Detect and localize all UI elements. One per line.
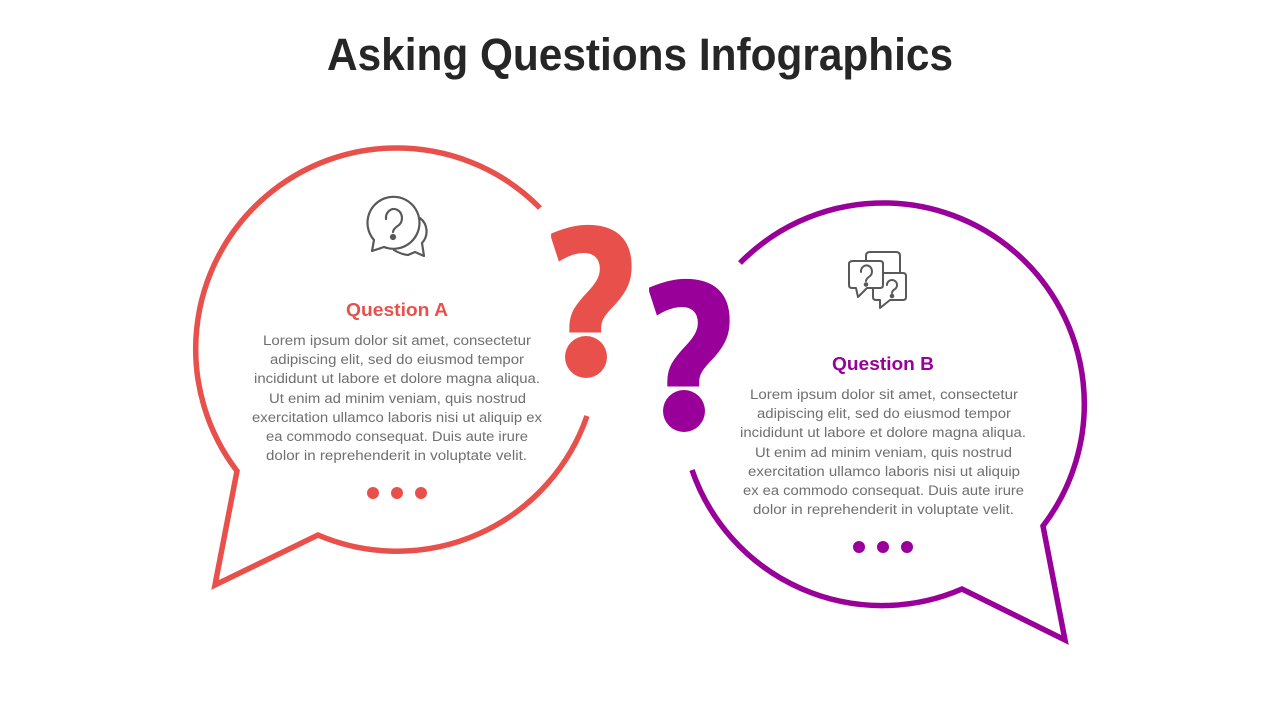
speech bubble outline B [692,203,1084,640]
speech bubble outline A [196,148,587,585]
body text B: Ut enim ad minim veniam, quis nostrud [755,445,1012,460]
icon: two round speech bubbles with question mark [367,197,427,256]
heading: Question A: Question A [346,300,448,320]
icon: red question mark [551,224,632,378]
icon: purple question mark [649,278,730,432]
panel: question A [196,148,587,585]
icon: three square speech bubbles with question marks [849,252,906,308]
body text B: adipiscing elit, sed do eiusmod tempor [757,406,1012,421]
body text A [252,333,542,463]
body text B: ex ea commodo consequat. Duis aute irure [743,483,1024,498]
body text A: adipiscing elit, sed do eiusmod tempor [270,352,525,367]
body text A: Lorem ipsum dolor sit amet, consectetur [263,333,532,348]
body text B [740,387,1026,517]
body text A: exercitation ullamco laboris nisi ut aliquip ex [252,410,542,425]
body text B: dolor in reprehenderit in voluptate velit. [753,502,1014,517]
body text A: incididunt ut labore et dolore magna aliqua. [254,371,540,386]
icon: purple question mark: ? [637,239,741,493]
panel: question B [692,203,1084,640]
body text B: incididunt ut labore et dolore magna aliqua. [740,425,1026,440]
title: Asking Questions Infographics [327,29,953,80]
body text B: Lorem ipsum dolor sit amet, consectetur [750,387,1019,402]
body text B: exercitation ullamco laboris nisi ut aliquip [748,464,1020,479]
body text A: dolor in reprehenderit in voluptate velit. [266,448,527,463]
body text A: Ut enim ad minim veniam, quis nostrud [269,391,526,406]
heading: Question B: Question B [832,354,934,374]
icon: red question mark: ? [539,185,643,439]
body text A: ea commodo consequat. Duis aute irure [266,429,528,444]
three dots A [367,487,427,499]
three dots B [853,541,913,553]
